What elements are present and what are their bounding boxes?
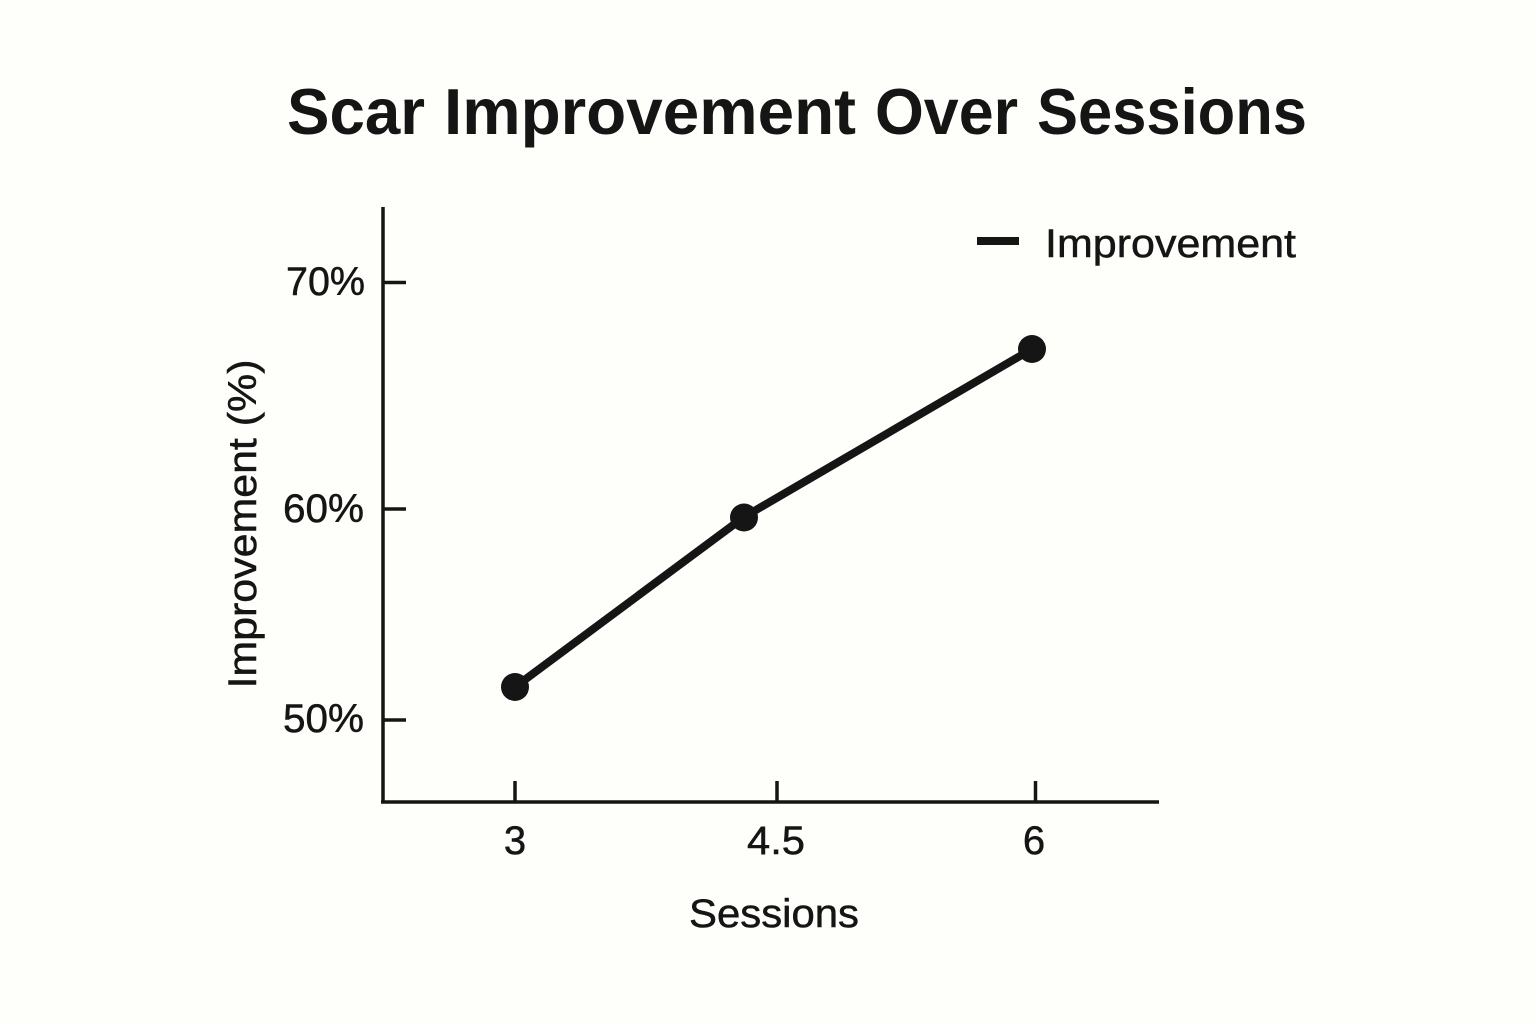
data line <box>515 349 1032 687</box>
title: Over <box>875 75 1018 148</box>
x tick labels: 4.5 <box>747 819 805 863</box>
title: Sessions <box>1037 75 1307 148</box>
title: Improvement <box>444 75 856 148</box>
x tick labels: 6 <box>1023 819 1045 863</box>
title: Scar <box>287 75 425 148</box>
legend: Improvement <box>1045 222 1296 266</box>
title <box>287 75 1307 148</box>
y tick labels: 70% <box>286 260 365 304</box>
y axis <box>383 207 406 803</box>
data points <box>501 335 1046 701</box>
y axis title: Improvement (%) <box>221 360 265 688</box>
x tick labels: 3 <box>504 819 526 863</box>
y tick labels: 60% <box>283 487 364 531</box>
y tick labels <box>283 260 365 741</box>
x tick labels <box>504 819 1045 863</box>
x axis <box>381 781 1159 802</box>
line chart <box>221 207 1296 936</box>
x axis title: Sessions <box>689 892 859 936</box>
y tick labels: 50% <box>283 697 364 741</box>
